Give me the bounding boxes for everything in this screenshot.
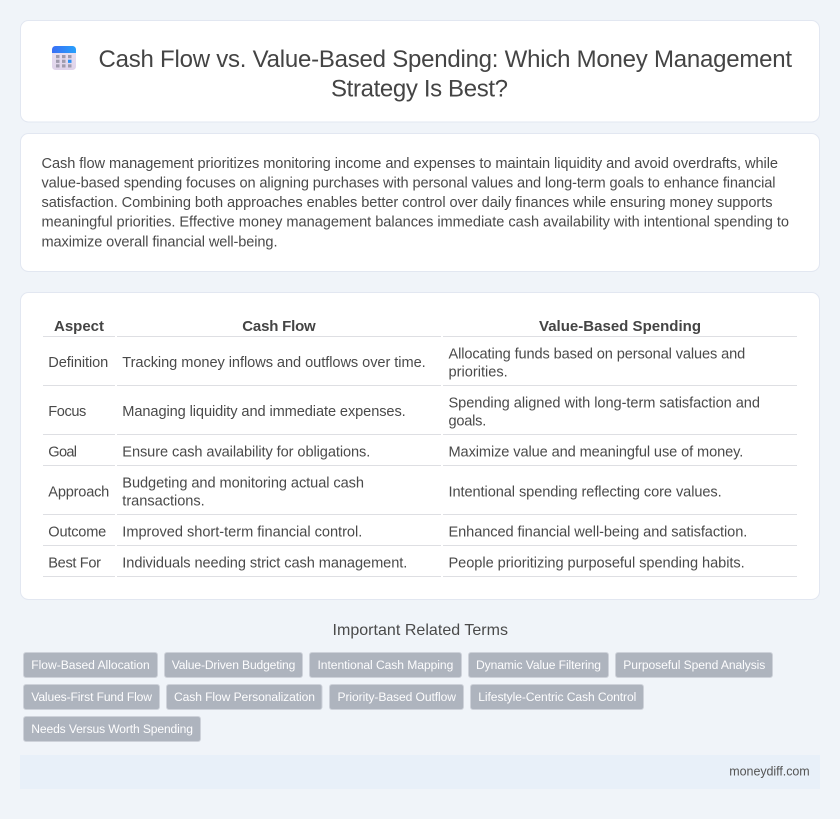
footer <box>20 755 820 789</box>
text block: summary: value-based spending focuses on aligning purchases with personal values and long-term goals to enhance financial <box>42 176 776 192</box>
tag <box>330 684 464 710</box>
table row: Approach: Budgeting and monitoring actual cash <box>122 475 364 491</box>
tag list: related terms <box>24 652 772 742</box>
table row: Focus <box>48 396 760 430</box>
table row: Definition <box>48 347 745 381</box>
table row: Goal: Ensure cash availability for obligations. <box>122 444 370 460</box>
text block: summary <box>42 156 789 250</box>
table row: Outcome: Enhanced financial well-being and satisfaction. <box>448 524 747 540</box>
panel: summary paragraph <box>20 134 820 272</box>
table row: Approach <box>48 475 722 509</box>
table header row: Value-Based Spending <box>539 318 701 335</box>
title <box>98 46 792 102</box>
table row: Definition: priorities. <box>448 365 508 381</box>
table row: Definition: Tracking money inflows and outflows over time. <box>122 355 426 371</box>
table row: Outcome: Outcome <box>48 524 106 540</box>
table row: Approach: transactions. <box>122 493 205 509</box>
table row: Goal: Maximize value and meaningful use of money. <box>448 444 743 460</box>
table header row <box>54 318 701 335</box>
tag: Value-Driven Budgeting <box>172 658 295 672</box>
panel: header <box>20 20 820 122</box>
table row: Goal <box>48 444 743 460</box>
tag: Lifestyle-Centric Cash Control <box>478 690 636 704</box>
tag: Cash Flow Personalization <box>174 690 315 704</box>
heading: related terms: Important Related Terms <box>332 622 508 639</box>
text block: summary: satisfaction. Combining both approaches enables better control over daily finances while ensuring money supports <box>42 195 772 211</box>
title: Cash Flow vs. Value-Based Spending: Which Money Management <box>98 46 792 73</box>
tag <box>164 652 302 678</box>
tag: Intentional Cash Mapping <box>318 658 453 672</box>
table row: Best For <box>48 555 745 571</box>
text block: summary: meaningful priorities. Effective money management balances immediate cash availability with intentional spending to <box>42 215 789 231</box>
tag <box>24 684 160 710</box>
table row: Outcome <box>48 524 747 540</box>
tag <box>616 652 772 678</box>
text block: summary: maximize overall financial well-being. <box>42 234 278 250</box>
table header row: Aspect <box>54 318 104 335</box>
table row: Approach: Intentional spending reflecting core values. <box>448 484 722 500</box>
table row: Goal: Goal <box>48 444 77 460</box>
table row: Focus: goals. <box>448 414 486 430</box>
table header row: Cash Flow <box>242 318 316 335</box>
footer: moneydiff.com <box>729 765 810 779</box>
tag <box>468 652 608 678</box>
table row: Outcome: Improved short-term financial control. <box>122 524 362 540</box>
tag: Values-First Fund Flow <box>31 690 152 704</box>
table row: Focus: Focus <box>48 404 86 420</box>
text block: summary: Cash flow management prioritizes monitoring income and expenses to maintain liquidity and avoid overdrafts, while <box>42 156 778 172</box>
tag <box>310 652 462 678</box>
tag <box>24 652 158 678</box>
tag <box>166 684 322 710</box>
table row: Best For: Best For <box>48 555 101 571</box>
tag <box>470 684 644 710</box>
tag: Priority-Based Outflow <box>338 690 456 704</box>
panel: comparison table <box>20 292 820 600</box>
icon: calendar <box>52 46 76 70</box>
table row: Best For: Individuals needing strict cash management. <box>122 555 407 571</box>
table row: Focus: Managing liquidity and immediate expenses. <box>122 404 406 420</box>
table row: Approach: Approach <box>48 484 109 500</box>
table row: Definition: Allocating funds based on personal values and <box>448 347 745 363</box>
tag <box>24 716 200 742</box>
table row: Best For: People prioritizing purposeful spending habits. <box>448 555 745 571</box>
table row: Definition: Definition <box>48 355 108 371</box>
tag: Purposeful Spend Analysis <box>623 658 765 672</box>
tag: Dynamic Value Filtering <box>476 658 601 672</box>
table row: Focus: Spending aligned with long-term satisfaction and <box>448 396 760 412</box>
tag: Flow-Based Allocation <box>31 658 150 672</box>
tag: Needs Versus Worth Spending <box>31 722 193 736</box>
title: Strategy Is Best? <box>331 76 508 102</box>
